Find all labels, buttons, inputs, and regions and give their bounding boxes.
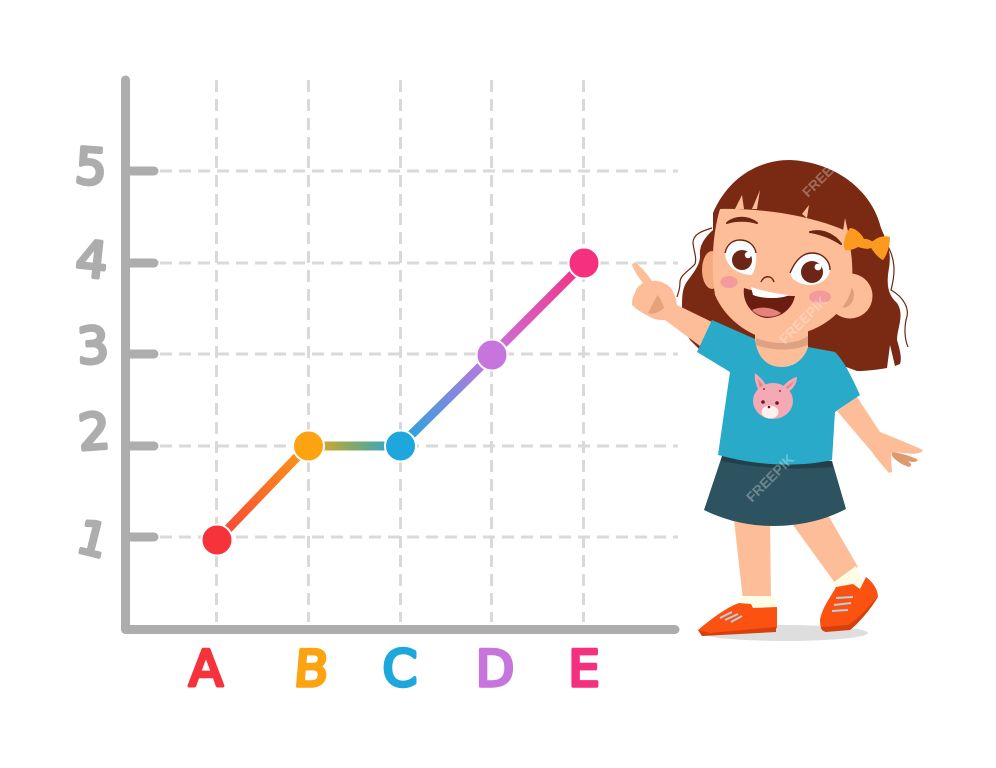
left eye <box>725 240 756 275</box>
x axis letters: E <box>568 640 600 698</box>
girl character <box>632 146 923 641</box>
rabbit print <box>753 373 797 419</box>
y axis numbers: 5 <box>73 137 109 197</box>
watermarks: FREEPIK <box>799 146 853 200</box>
right eye <box>790 253 830 285</box>
hair bow <box>844 228 890 260</box>
floor shadow <box>702 625 868 641</box>
x axis letters: A <box>189 640 223 698</box>
cheeks <box>720 276 738 288</box>
line chart <box>72 80 678 698</box>
right shoe <box>820 577 878 632</box>
legs <box>734 515 858 600</box>
x axis letters: D <box>476 640 514 698</box>
bangs spikes <box>735 190 849 236</box>
socks <box>741 566 866 608</box>
y axis numbers: 4 <box>73 229 111 290</box>
mouth <box>744 287 795 318</box>
neck shadow <box>756 336 808 350</box>
x axis letters <box>189 640 600 698</box>
skirt <box>704 456 846 526</box>
y axis numbers: 1 <box>72 509 113 569</box>
nose <box>761 277 774 282</box>
t-shirt <box>697 320 860 465</box>
left shoe <box>698 603 777 636</box>
data points <box>202 248 600 556</box>
pointing arm and hand <box>632 263 712 346</box>
ears <box>828 274 872 318</box>
x axis letters: C <box>383 640 417 698</box>
y axis numbers: 2 <box>76 402 112 462</box>
right arm and hand <box>837 397 923 473</box>
neck <box>755 330 808 367</box>
hair wisps <box>677 228 908 347</box>
x axis letters: B <box>292 640 331 698</box>
axes <box>126 80 675 630</box>
hair back <box>681 160 901 371</box>
eyebrows <box>727 218 841 244</box>
watermarks: FREEPIK <box>743 451 797 505</box>
data line segments <box>228 274 573 529</box>
face <box>713 209 852 339</box>
watermarks <box>743 146 853 505</box>
watermarks: FREEPIK <box>776 293 830 347</box>
y axis numbers <box>72 137 113 569</box>
y axis numbers: 3 <box>76 316 110 376</box>
